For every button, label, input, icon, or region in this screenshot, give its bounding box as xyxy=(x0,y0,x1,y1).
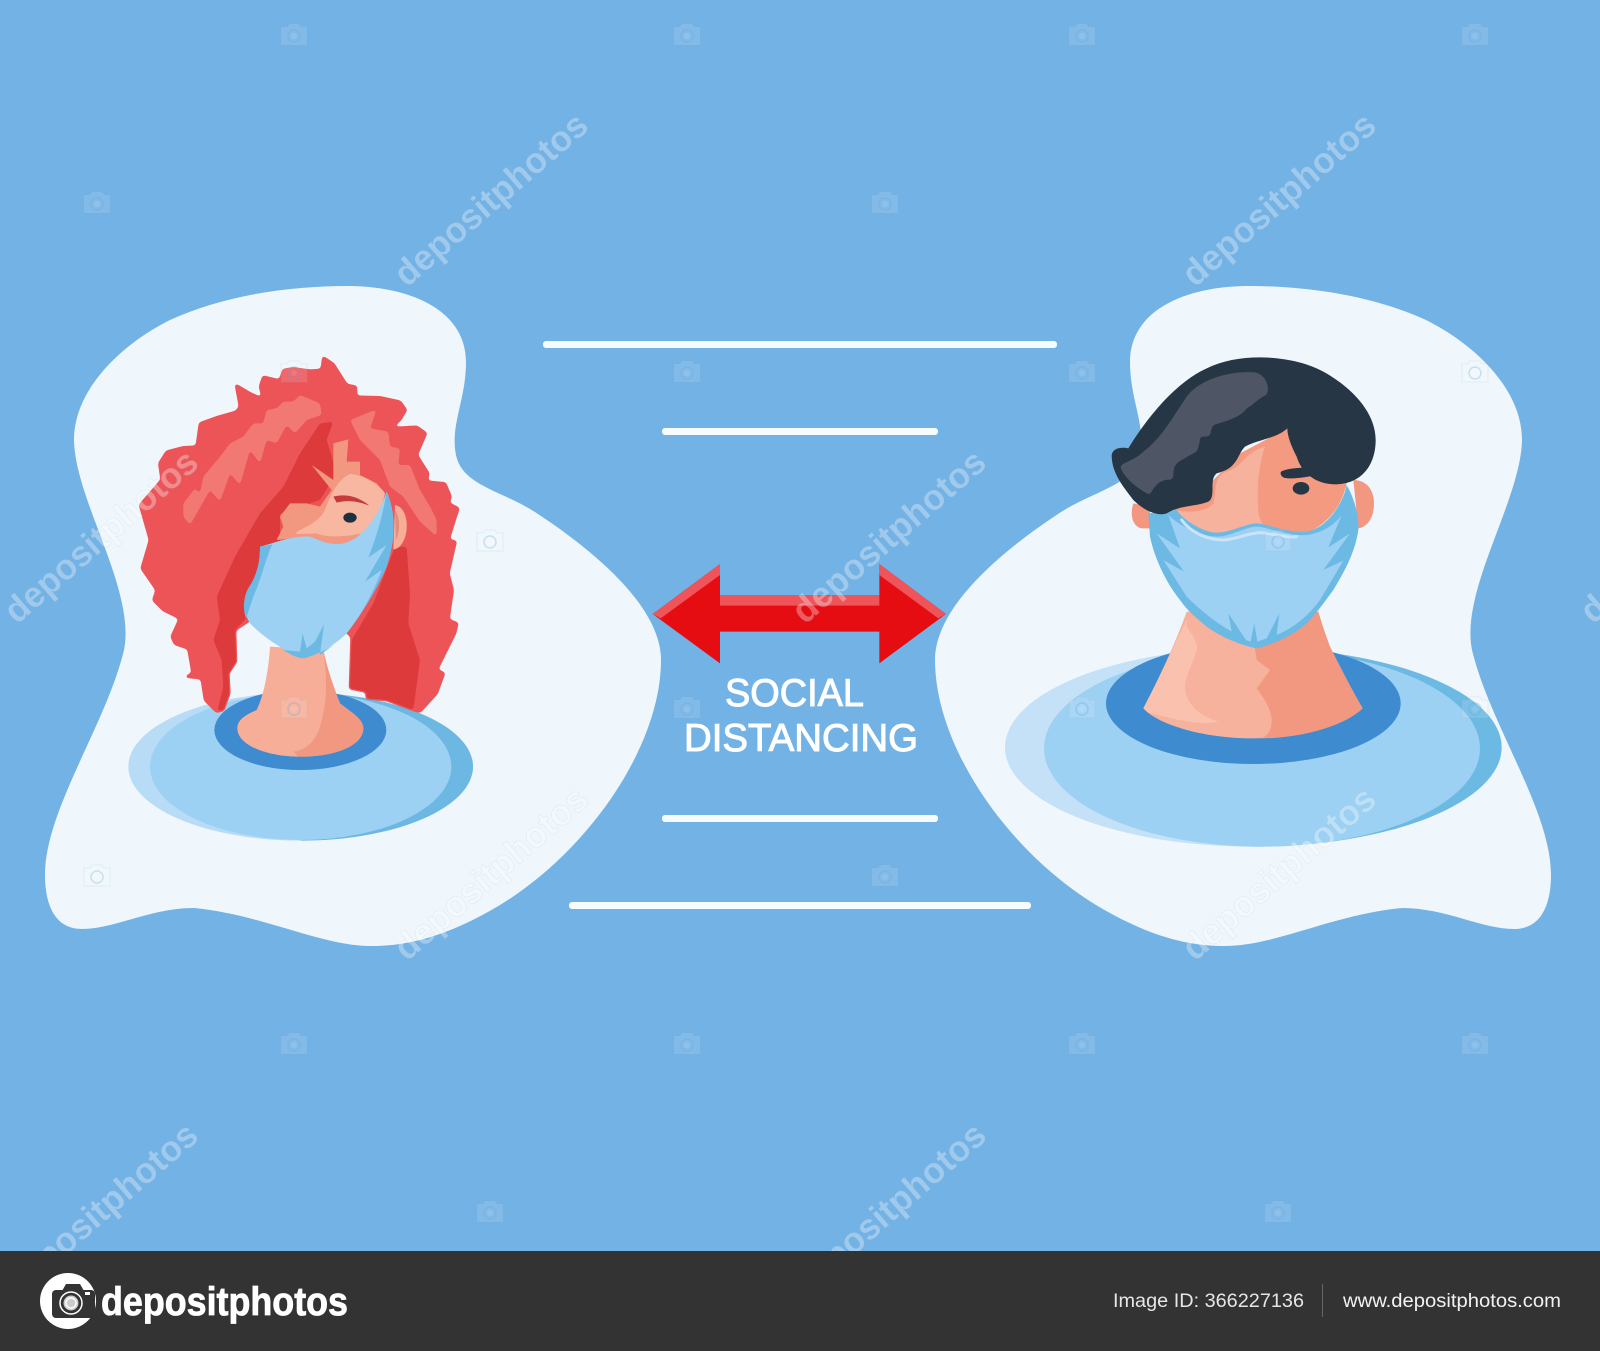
distance lines top xyxy=(543,341,1057,435)
woman neck xyxy=(237,647,363,757)
watermark text: depositphotos xyxy=(783,1114,994,1304)
man ears xyxy=(1132,480,1374,528)
footer url: www.depositphotos.com xyxy=(1342,1290,1561,1312)
title: social distancing xyxy=(684,672,918,760)
double arrow xyxy=(653,564,946,663)
footer logo icon: camera xyxy=(40,1273,96,1329)
footer image id: Image ID: 366227136 xyxy=(1113,1290,1304,1312)
footer logo wordmark: depositphotos xyxy=(101,1280,348,1324)
watermark text: depositphotos xyxy=(1173,778,1384,968)
footer bar xyxy=(0,1251,1600,1351)
watermark text: depositphotos xyxy=(0,1114,206,1304)
panel: woman blob xyxy=(45,286,661,946)
man neck xyxy=(1143,612,1363,738)
man figure with mask xyxy=(1005,357,1502,847)
watermark text: depositphotos xyxy=(0,441,206,631)
watermark text: depositphotos xyxy=(1173,104,1384,294)
distance lines bottom xyxy=(569,815,1031,909)
woman platform ellipse xyxy=(128,690,473,841)
title: social distancing: SOCIAL xyxy=(725,672,864,715)
panel: man blob xyxy=(935,286,1551,946)
title: social distancing: DISTANCING xyxy=(684,717,918,760)
man mask xyxy=(1148,485,1358,648)
watermark text: depositphotos xyxy=(385,104,596,294)
man face xyxy=(1173,428,1347,534)
man hair xyxy=(1112,357,1376,514)
watermark text: depositphotos xyxy=(783,441,994,631)
woman mask xyxy=(244,492,394,658)
woman face xyxy=(277,439,407,549)
watermark camera icons xyxy=(84,24,1488,1222)
watermark text: depositphotos xyxy=(385,778,596,968)
woman hair xyxy=(140,357,458,712)
woman figure with mask xyxy=(128,357,473,841)
man platform ellipse xyxy=(1005,643,1502,847)
